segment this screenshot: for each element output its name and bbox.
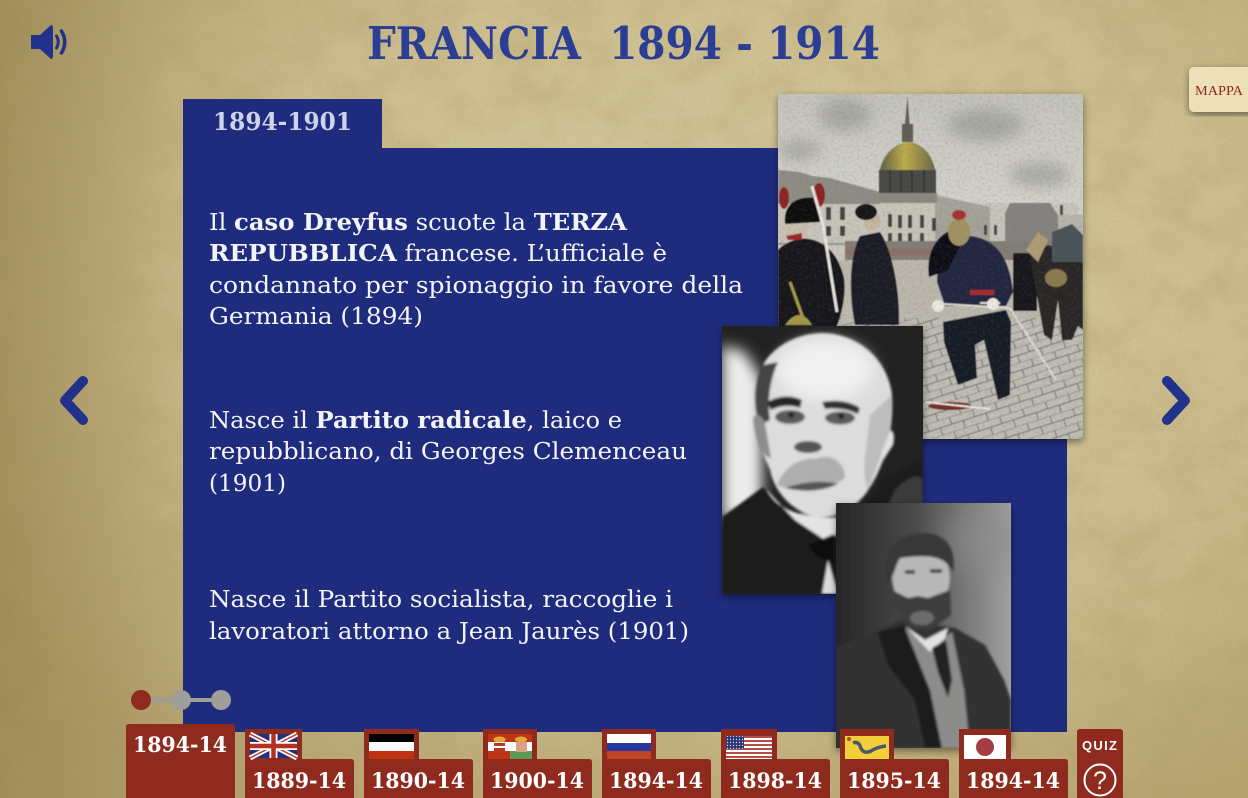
tab: China: [840, 729, 949, 798]
tab: France active: 1894-14: [133, 732, 227, 757]
text block: caso Dreyfus: [209, 209, 743, 330]
panel: main blue content: [183, 99, 1067, 732]
text block: Partito radicale: Nasce il Partito radicale , laico e: [209, 407, 622, 434]
tab: China: 1895-14: [847, 768, 941, 793]
tab: Japan: 1894-14: [966, 768, 1060, 793]
tab: United States: [721, 729, 830, 798]
tab: Germany: [364, 729, 473, 798]
icon: question mark: ?: [1093, 767, 1107, 795]
text block: Partito radicale: (1901): [209, 471, 286, 497]
text block: Partito socialista: lavoratori attorno a Jean Jaurès (1901): [209, 619, 689, 645]
flag: Austria-Hungary: [488, 734, 532, 759]
tab: United Kingdom: [245, 729, 354, 798]
image: portrait of Jean Jaurès: [836, 503, 1025, 748]
text block: caso Dreyfus: Il caso Dreyfus scuote la TERZA: [209, 209, 628, 236]
icon: speaker: [31, 25, 65, 59]
button: mappa: [1189, 67, 1248, 112]
tab: Russia: [602, 729, 711, 798]
cloak and horse: [1013, 253, 1037, 311]
flag: UK: [250, 734, 297, 758]
text block: caso Dreyfus: Germania (1894): [209, 304, 423, 330]
tab: quiz: [1077, 729, 1123, 798]
progress dots: [131, 690, 231, 710]
tab: Japan: [959, 729, 1068, 798]
flag: Japan: [964, 735, 1006, 759]
text block: Partito radicale: repubblicano, di Georges Clemenceau: [209, 439, 687, 465]
period tab: [183, 99, 382, 149]
Dreyfus: [937, 236, 1013, 306]
tab: Austria-Hungary: 1900-14: [490, 768, 584, 793]
flag: Germany: [369, 734, 414, 759]
text block: Partito radicale: [209, 407, 687, 497]
flag: USA: [726, 736, 772, 759]
tab: Russia: 1894-14: [609, 768, 703, 793]
soldier left: [778, 239, 845, 330]
text block: Partito socialista: [209, 587, 689, 645]
text block: caso Dreyfus: REPUBBLICA francese. L’ufficiale è: [209, 240, 667, 267]
tab: Germany: 1890-14: [371, 768, 465, 793]
blood and sword on ground: [928, 402, 972, 410]
button: mappa: MAPPA: [1195, 84, 1244, 99]
arrow: previous: [65, 381, 83, 420]
image: degradation of Dreyfus illustration: [778, 94, 1083, 439]
period tab: 1894-1901: [213, 107, 352, 136]
man in black: [851, 232, 899, 325]
flag: Russia: [607, 734, 651, 759]
tab: United Kingdom: 1889-14: [252, 768, 346, 793]
text block: Partito socialista: Nasce il Partito socialista, raccoglie i: [209, 587, 673, 613]
arrow: next: [1167, 381, 1185, 420]
tab: France active: [126, 724, 235, 798]
title: FRANCIA 1894 - 1914: [367, 17, 880, 70]
tab: Austria-Hungary: [483, 729, 592, 798]
image: portrait of Georges Clemenceau: [722, 326, 923, 594]
text block: caso Dreyfus: condannato per spionaggio in favore della: [209, 273, 743, 299]
tab: United States: 1898-14: [728, 768, 822, 793]
flag: China dragon: [845, 736, 889, 759]
tab: quiz: QUIZ: [1082, 738, 1117, 753]
